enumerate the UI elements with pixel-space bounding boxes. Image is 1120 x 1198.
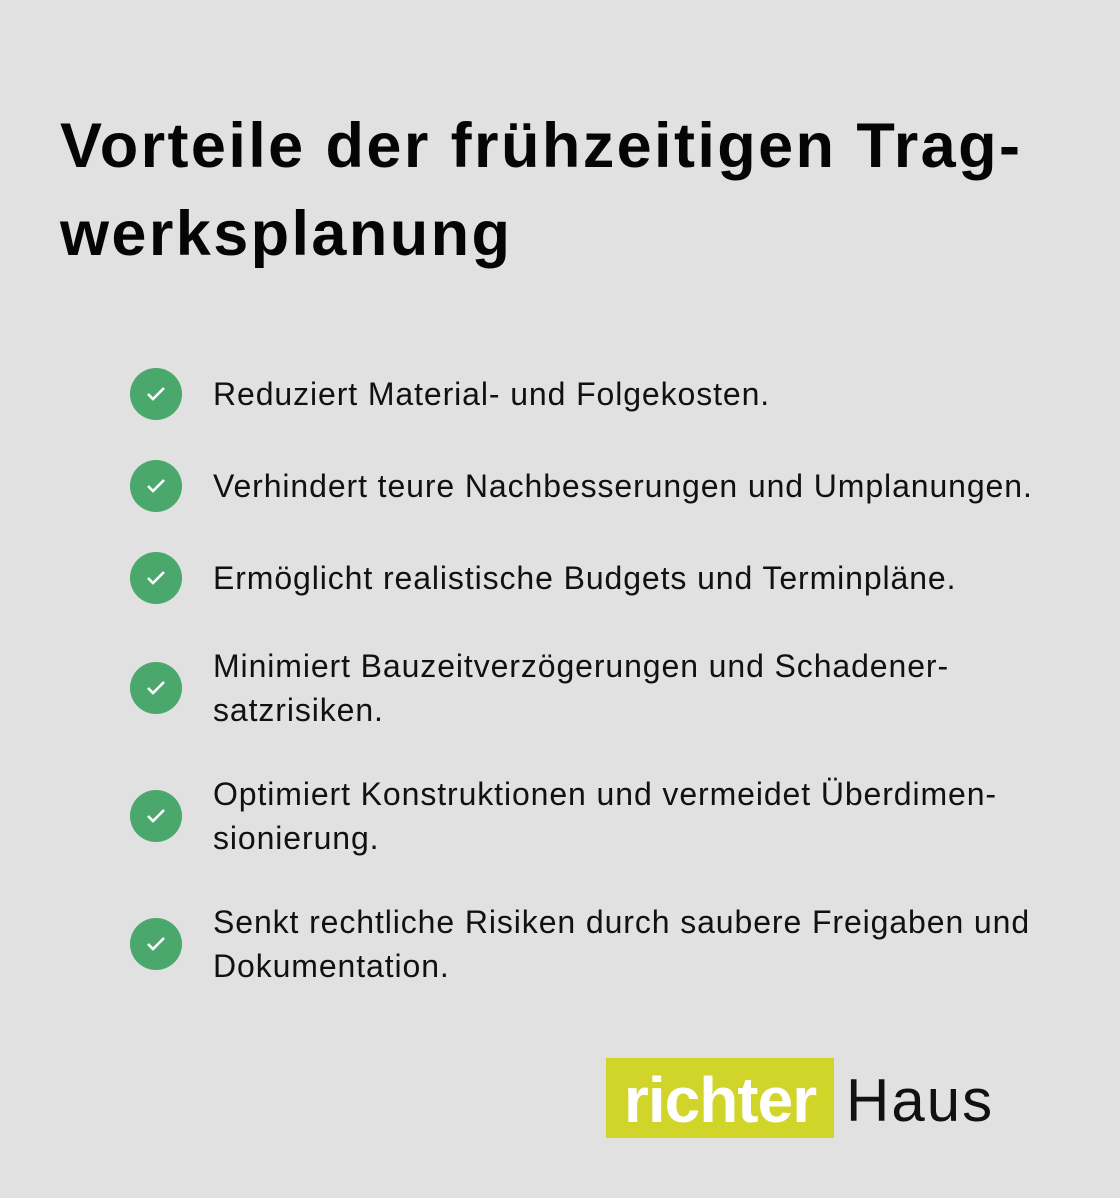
item 1: Reduziert Material- und Folgekosten. [213,376,770,412]
item 3 [130,552,956,604]
item 6: Senkt rechtliche Risiken durch saubere Freigaben und [213,904,1030,940]
item 3: Ermöglicht realistische Budgets und Terminpläne. [213,560,956,596]
icon: check [130,662,182,714]
logo [606,1058,994,1138]
logo: richter [624,1064,816,1136]
title [60,111,1022,269]
logo: Haus [846,1067,994,1134]
item 5 [130,776,997,856]
title: Vorteile der frühzeitigen Trag- [60,111,1022,181]
icon: check [130,790,182,842]
item 6 [130,904,1030,984]
item 5: sionierung. [213,820,379,856]
item 6: Dokumentation. [213,948,450,984]
item 2: Verhindert teure Nachbesserungen und Umplanungen. [213,468,1033,504]
icon: check [130,368,182,420]
item 4: satzrisiken. [213,692,384,728]
icon: check [130,918,182,970]
icon: check [130,460,182,512]
item 1 [130,368,770,420]
item 5: Optimiert Konstruktionen und vermeidet Überdimen- [213,776,997,812]
item 2 [130,460,1033,512]
icon: check [130,552,182,604]
title: werksplanung [60,199,512,269]
item 4: Minimiert Bauzeitverzögerungen und Schadener- [213,648,949,684]
item 4 [130,648,949,728]
